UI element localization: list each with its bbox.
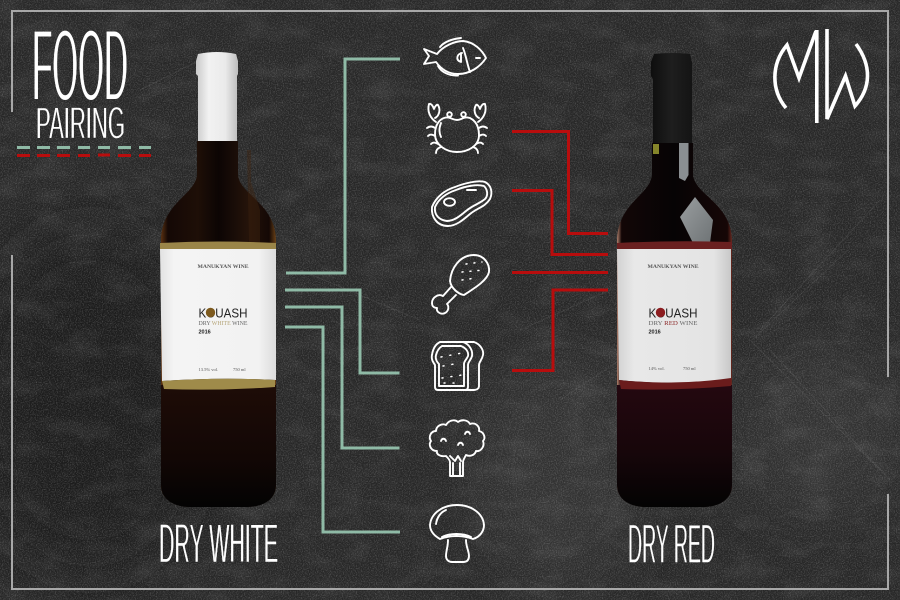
producer name: MANUKYAN WINE xyxy=(197,264,249,270)
bottle: dry white xyxy=(160,52,276,507)
glass body xyxy=(161,141,276,507)
glass body xyxy=(617,143,732,507)
icon: fish xyxy=(424,38,486,76)
wine name: KOUASH xyxy=(648,306,698,320)
icon: broccoli xyxy=(430,420,484,476)
strength and volume: 14% vol. xyxy=(648,366,665,371)
producer name: MANUKYAN WINE xyxy=(647,264,699,270)
text: DRY WHITE xyxy=(159,512,278,574)
icon: chicken leg xyxy=(432,255,489,314)
label: 750 ml xyxy=(233,367,246,372)
icon: crab xyxy=(427,104,487,153)
text: FOOD xyxy=(32,8,128,122)
glass highlights xyxy=(679,143,688,181)
wine type: DRY WHITE WINE xyxy=(198,321,248,327)
title: food pairing xyxy=(32,8,128,148)
lower glass xyxy=(161,385,276,507)
wine type: DRY RED WINE xyxy=(648,321,698,327)
connector lines: dry white pairings xyxy=(285,59,400,532)
vintage: 2016 xyxy=(648,330,661,336)
dashed green and red divider xyxy=(17,148,151,156)
connector lines: dry red pairings xyxy=(512,132,608,370)
black capsule xyxy=(651,53,692,143)
label xyxy=(160,242,276,390)
icon: bread xyxy=(432,342,483,390)
icon: steak xyxy=(432,181,491,226)
lower glass xyxy=(617,385,732,507)
title: food pairing: PAIRING xyxy=(36,98,125,148)
bottle: dry red xyxy=(617,53,732,507)
strength and volume: 13.5% vol. xyxy=(198,367,218,372)
label xyxy=(617,241,732,390)
vintage: 2016 xyxy=(198,330,211,336)
foil capsule xyxy=(196,52,238,141)
label: 750 ml xyxy=(683,366,696,371)
icon: mushroom xyxy=(430,505,484,562)
logo: MW monogram xyxy=(775,29,868,123)
text: DRY RED xyxy=(628,512,715,575)
wine name: KOUASH xyxy=(198,306,248,320)
